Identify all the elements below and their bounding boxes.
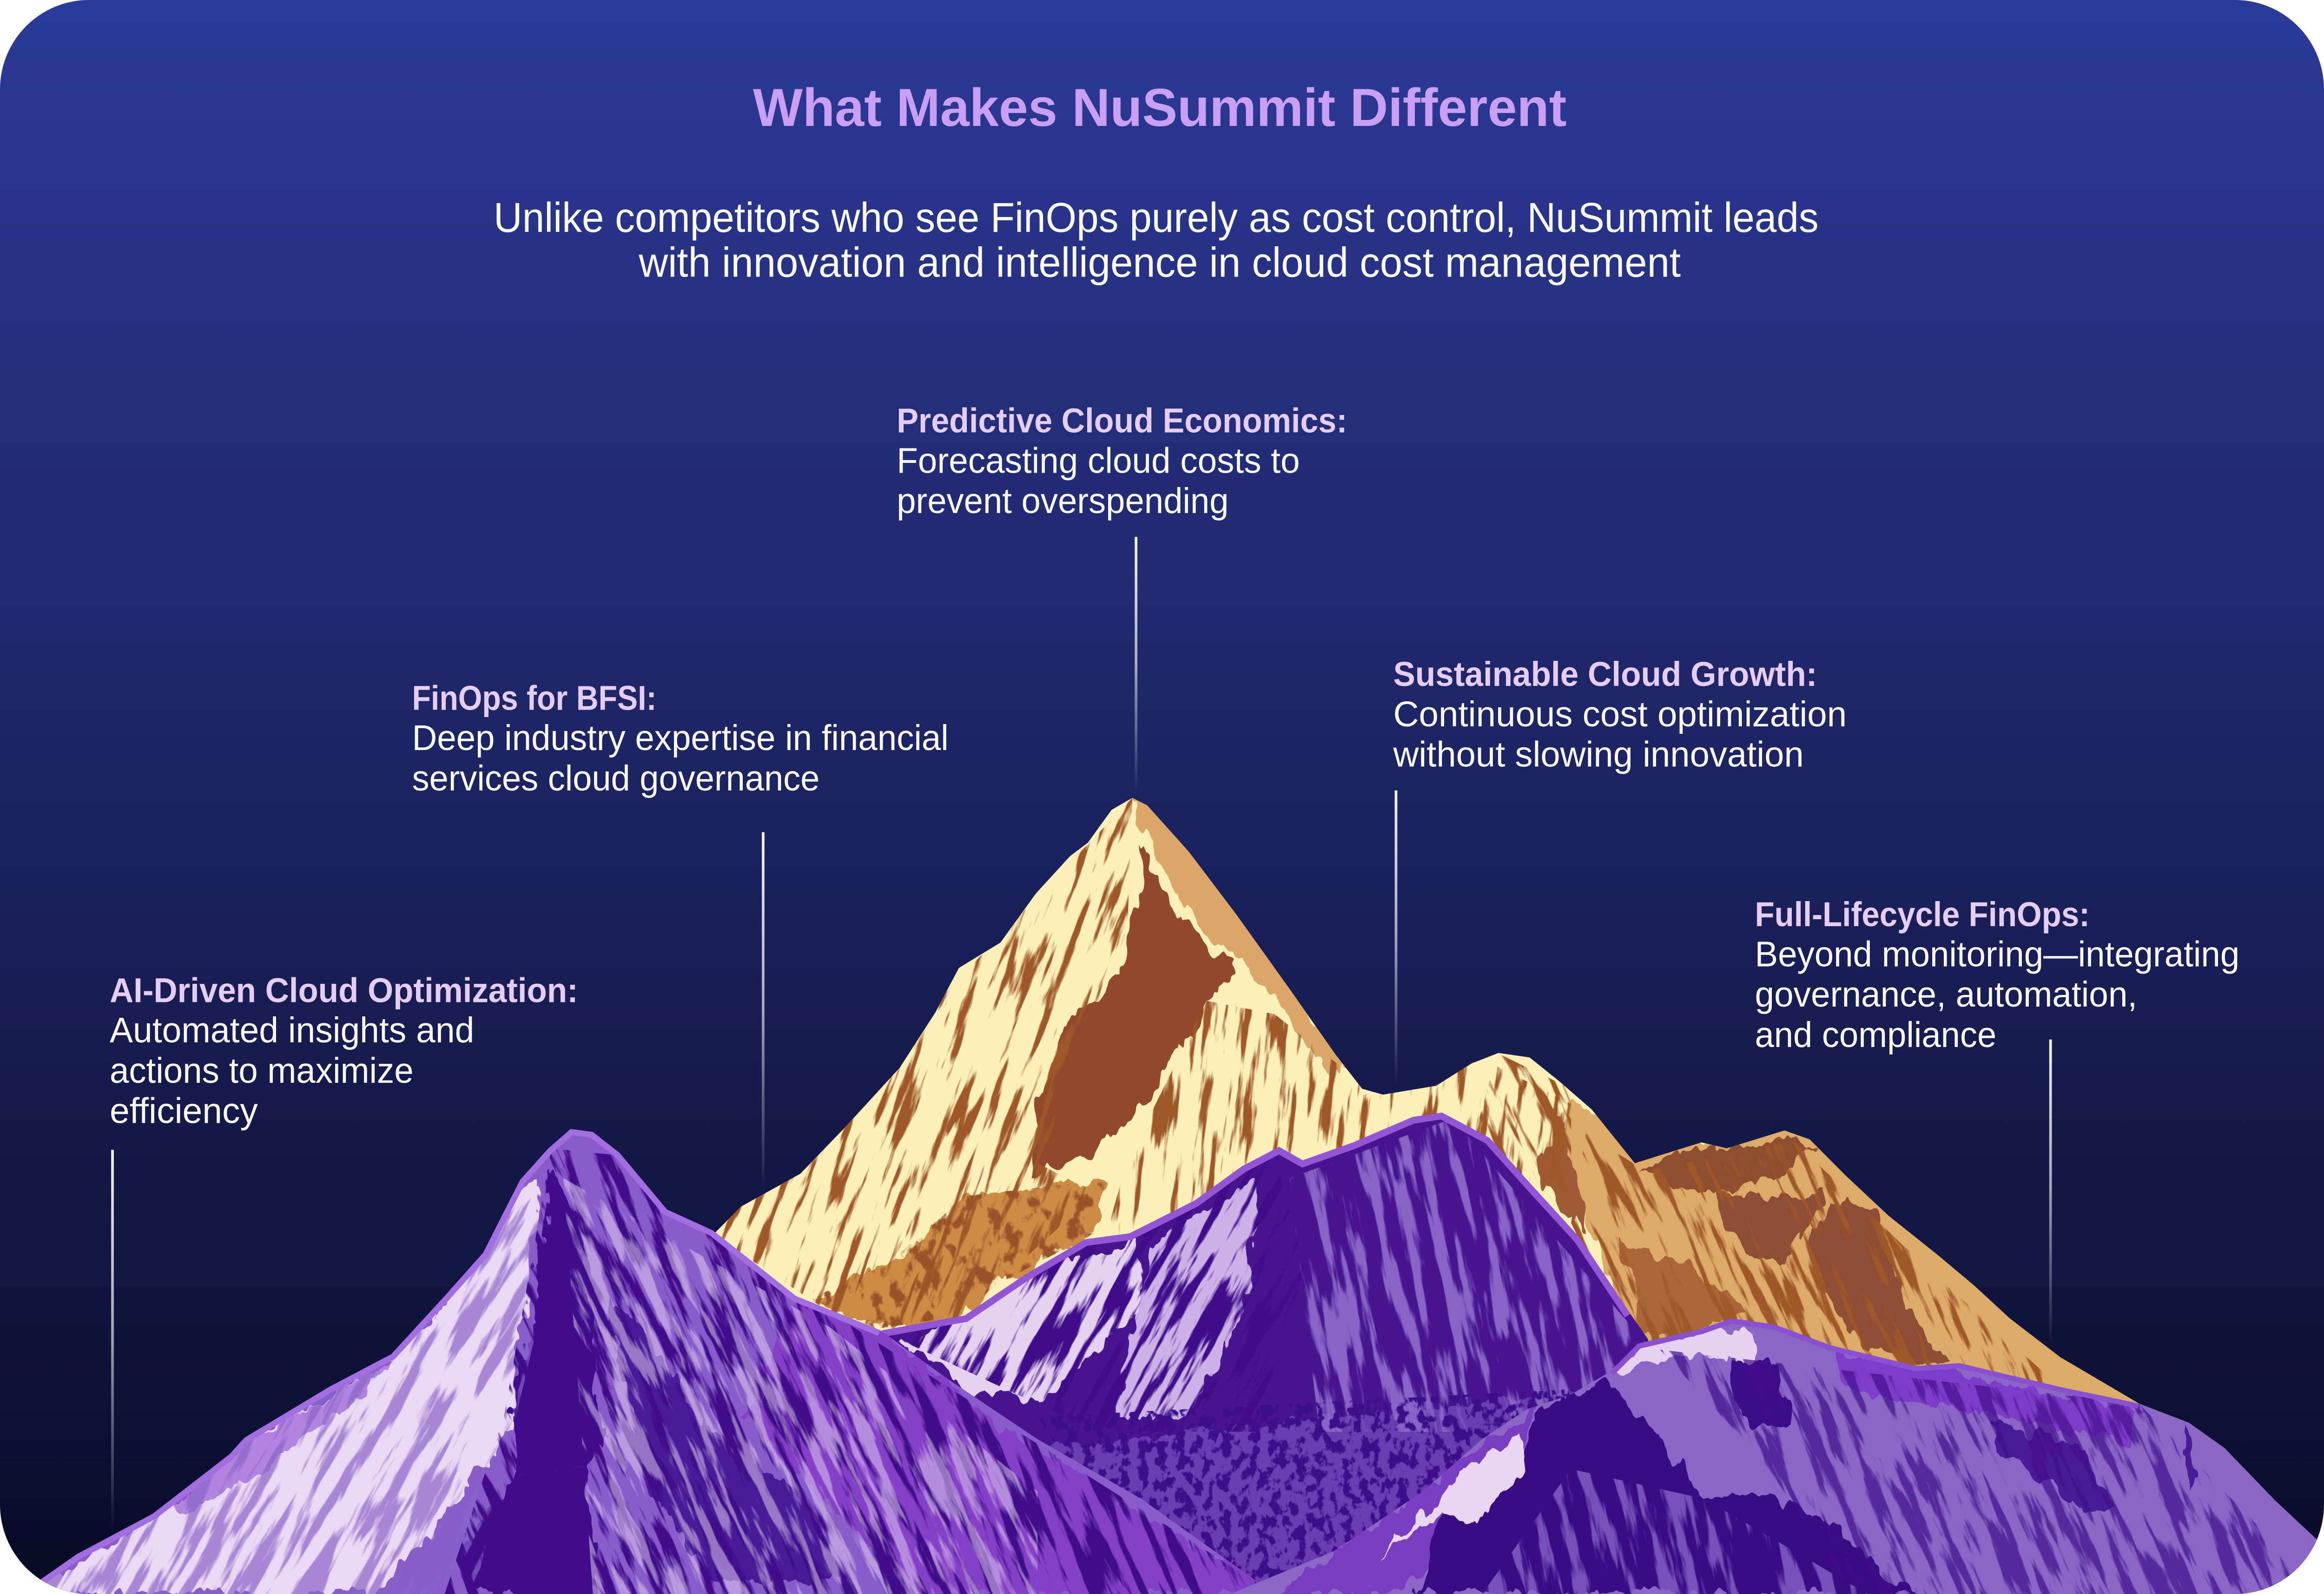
purple mountain: front right [1223,1312,2324,1594]
callout: Full-Lifecycle FinOps [1755,895,2239,1055]
callout: AI-Driven Cloud Optimization: efficiency [110,1091,258,1131]
callout: Sustainable Cloud Growth: Continuous cost optimization [1393,695,1847,734]
callout: Full-Lifecycle FinOps: governance, automation, [1755,975,2137,1014]
callout: Sustainable Cloud Growth: Sustainable Cloud Growth: [1393,655,1817,693]
intro text [494,194,1819,285]
callout: AI-Driven Cloud Optimization: actions to maximize [110,1051,414,1091]
callout: Full-Lifecycle FinOps: Beyond monitoring—integrating [1755,935,2239,975]
callout: Sustainable Cloud Growth [1393,655,1847,775]
callout: FinOps for BFSI: services cloud governance [412,759,819,798]
callout: Sustainable Cloud Growth: without slowing innovation [1393,735,1804,775]
callout: AI-Driven Cloud Optimization: Automated insights and [110,1011,474,1050]
intro text: with innovation and intelligence in cloud cost management [638,239,1681,285]
connector lines [111,537,2052,1530]
callout: Predictive Cloud Economics: Forecasting cloud costs to [897,441,1300,481]
callout: Predictive Cloud Economics: Predictive Cloud Economics: [897,401,1347,440]
callout: FinOps for BFSI: Deep industry expertise in financial [412,718,949,758]
mountain illustration [0,783,2324,1594]
gold mountain range [715,797,2139,1403]
callout: FinOps for BFSI [412,678,949,798]
purple mountain: left [0,1119,1289,1594]
callout: FinOps for BFSI: FinOps for BFSI: [412,678,657,718]
callout: Full-Lifecycle FinOps: Full-Lifecycle FinOps: [1755,895,2090,934]
callout: Predictive Cloud Economics: prevent overspending [897,481,1228,521]
callout: AI-Driven Cloud Optimization [110,971,578,1131]
callout: AI-Driven Cloud Optimization: AI-Driven Cloud Optimization: [110,971,578,1010]
purple mountain: middle [874,1104,1660,1594]
callout: Full-Lifecycle FinOps: and compliance [1755,1015,1996,1055]
intro text: Unlike competitors who see FinOps purely as cost control, NuSummit leads [494,194,1819,241]
title: What Makes NuSummit Different [753,78,1567,138]
callout: Predictive Cloud Economics [897,401,1347,521]
